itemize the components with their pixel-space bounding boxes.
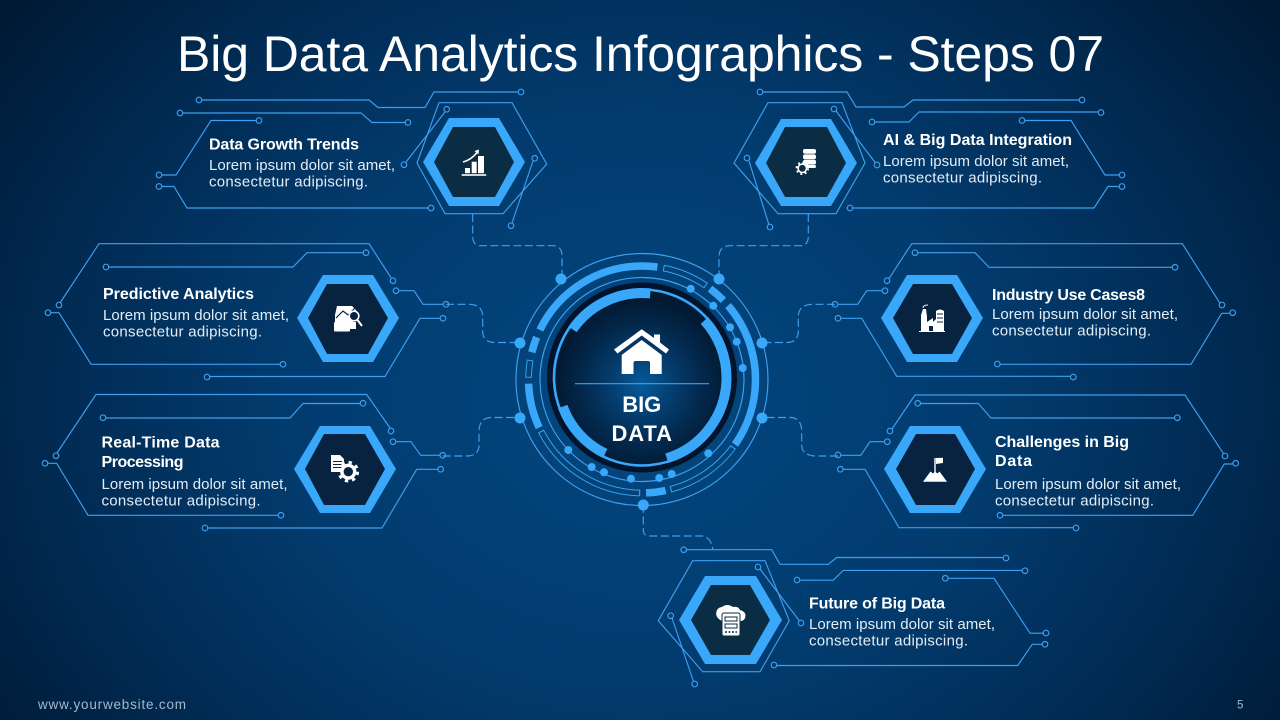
hub label: DATA bbox=[612, 421, 672, 446]
icon: flag on mountain bbox=[923, 458, 947, 482]
text: challenges in big data bbox=[995, 434, 1181, 510]
panel: real-time data processing bbox=[42, 394, 446, 531]
panel: predictive analytics bbox=[45, 244, 449, 380]
text: predictive analytics: consectetur adipiscing. bbox=[103, 324, 262, 341]
text: real-time data processing: Lorem ipsum dolor sit amet, bbox=[102, 476, 288, 493]
text: data growth trends: Lorem ipsum dolor sit amet, bbox=[209, 157, 395, 174]
text: industry use cases bbox=[992, 287, 1178, 340]
hub label bbox=[612, 392, 672, 446]
text: data growth trends: Data Growth Trends bbox=[209, 136, 359, 153]
text: ai and big data: consectetur adipiscing. bbox=[883, 170, 1042, 187]
text: real-time data processing: consectetur adipiscing. bbox=[102, 493, 260, 510]
text: industry use cases: consectetur adipiscing. bbox=[992, 323, 1151, 340]
ring nodes bbox=[514, 274, 768, 510]
text: industry use cases: Lorem ipsum dolor sit amet, bbox=[992, 306, 1178, 323]
circuit lines bbox=[734, 89, 1125, 230]
icon: house bbox=[614, 329, 669, 374]
hexagon bbox=[755, 119, 857, 206]
text: challenges in big data: Challenges in Big bbox=[995, 434, 1129, 451]
text: ai and big data: Lorem ipsum dolor sit amet, bbox=[883, 153, 1069, 170]
circuit lines bbox=[832, 244, 1235, 380]
text: future of big data: Lorem ipsum dolor sit amet, bbox=[809, 616, 995, 633]
panel: industry use cases bbox=[832, 244, 1235, 380]
icon: database with gear bbox=[796, 149, 816, 174]
icon: cloud server bbox=[716, 605, 745, 636]
text: data growth trends bbox=[209, 136, 395, 191]
text: challenges in big data: Lorem ipsum dolor sit amet, bbox=[995, 476, 1181, 493]
icon: analytics report with magnifier bbox=[334, 306, 362, 332]
panel: ai and big data integration bbox=[734, 89, 1125, 230]
dark ring bbox=[547, 282, 737, 472]
text: industry use cases: Industry Use Cases8 bbox=[992, 287, 1145, 304]
circuit lines bbox=[835, 395, 1238, 531]
hexagon bbox=[294, 426, 396, 513]
divider bbox=[575, 383, 709, 385]
text: challenges in big data: consectetur adipiscing. bbox=[995, 493, 1154, 510]
text: ai and big data bbox=[883, 132, 1072, 187]
text: real-time data processing: Processing bbox=[102, 454, 184, 471]
hexagon bbox=[423, 118, 525, 206]
dashed connectors bbox=[443, 214, 838, 549]
hexagon bbox=[679, 576, 782, 664]
hub label: BIG bbox=[622, 392, 661, 417]
central hub bbox=[443, 214, 838, 549]
page number: 5 bbox=[1237, 700, 1243, 712]
text: data growth trends: consectetur adipiscing. bbox=[209, 174, 368, 191]
text: real-time data processing bbox=[102, 435, 288, 510]
text: predictive analytics: Predictive Analytics bbox=[103, 286, 254, 303]
circuit lines bbox=[658, 547, 1049, 687]
text: real-time data processing: Real-Time Data bbox=[102, 435, 220, 452]
hexagon bbox=[297, 275, 399, 362]
circuit lines bbox=[156, 89, 547, 228]
segmented band bbox=[528, 266, 756, 493]
text: predictive analytics: Lorem ipsum dolor sit amet, bbox=[103, 307, 289, 324]
inner disk bbox=[555, 290, 729, 464]
icon: factory bbox=[919, 305, 945, 332]
circuit lines bbox=[42, 394, 446, 531]
blue ring bbox=[554, 290, 730, 466]
text: future of big data bbox=[809, 596, 995, 650]
panel: data growth trends bbox=[156, 89, 547, 228]
circuit lines bbox=[45, 244, 449, 380]
outer rings bbox=[516, 254, 768, 506]
hexagon bbox=[881, 275, 983, 362]
panel: challenges in big data bbox=[835, 395, 1238, 531]
icon: document with gear bbox=[331, 455, 358, 481]
hexagon bbox=[884, 426, 986, 513]
footer website: www.yourwebsite.com bbox=[37, 697, 186, 712]
text: predictive analytics bbox=[103, 286, 289, 341]
icon: growth chart bbox=[462, 150, 486, 176]
text: ai and big data: AI & Big Data Integration bbox=[883, 132, 1072, 149]
title: Big Data Analytics Infographics - Steps 07 bbox=[177, 26, 1104, 82]
text: future of big data: consectetur adipiscing. bbox=[809, 633, 968, 650]
text: challenges in big data: Data bbox=[995, 453, 1032, 470]
text: future of big data: Future of Big Data bbox=[809, 596, 945, 613]
panel: future of big data bbox=[658, 547, 1049, 687]
